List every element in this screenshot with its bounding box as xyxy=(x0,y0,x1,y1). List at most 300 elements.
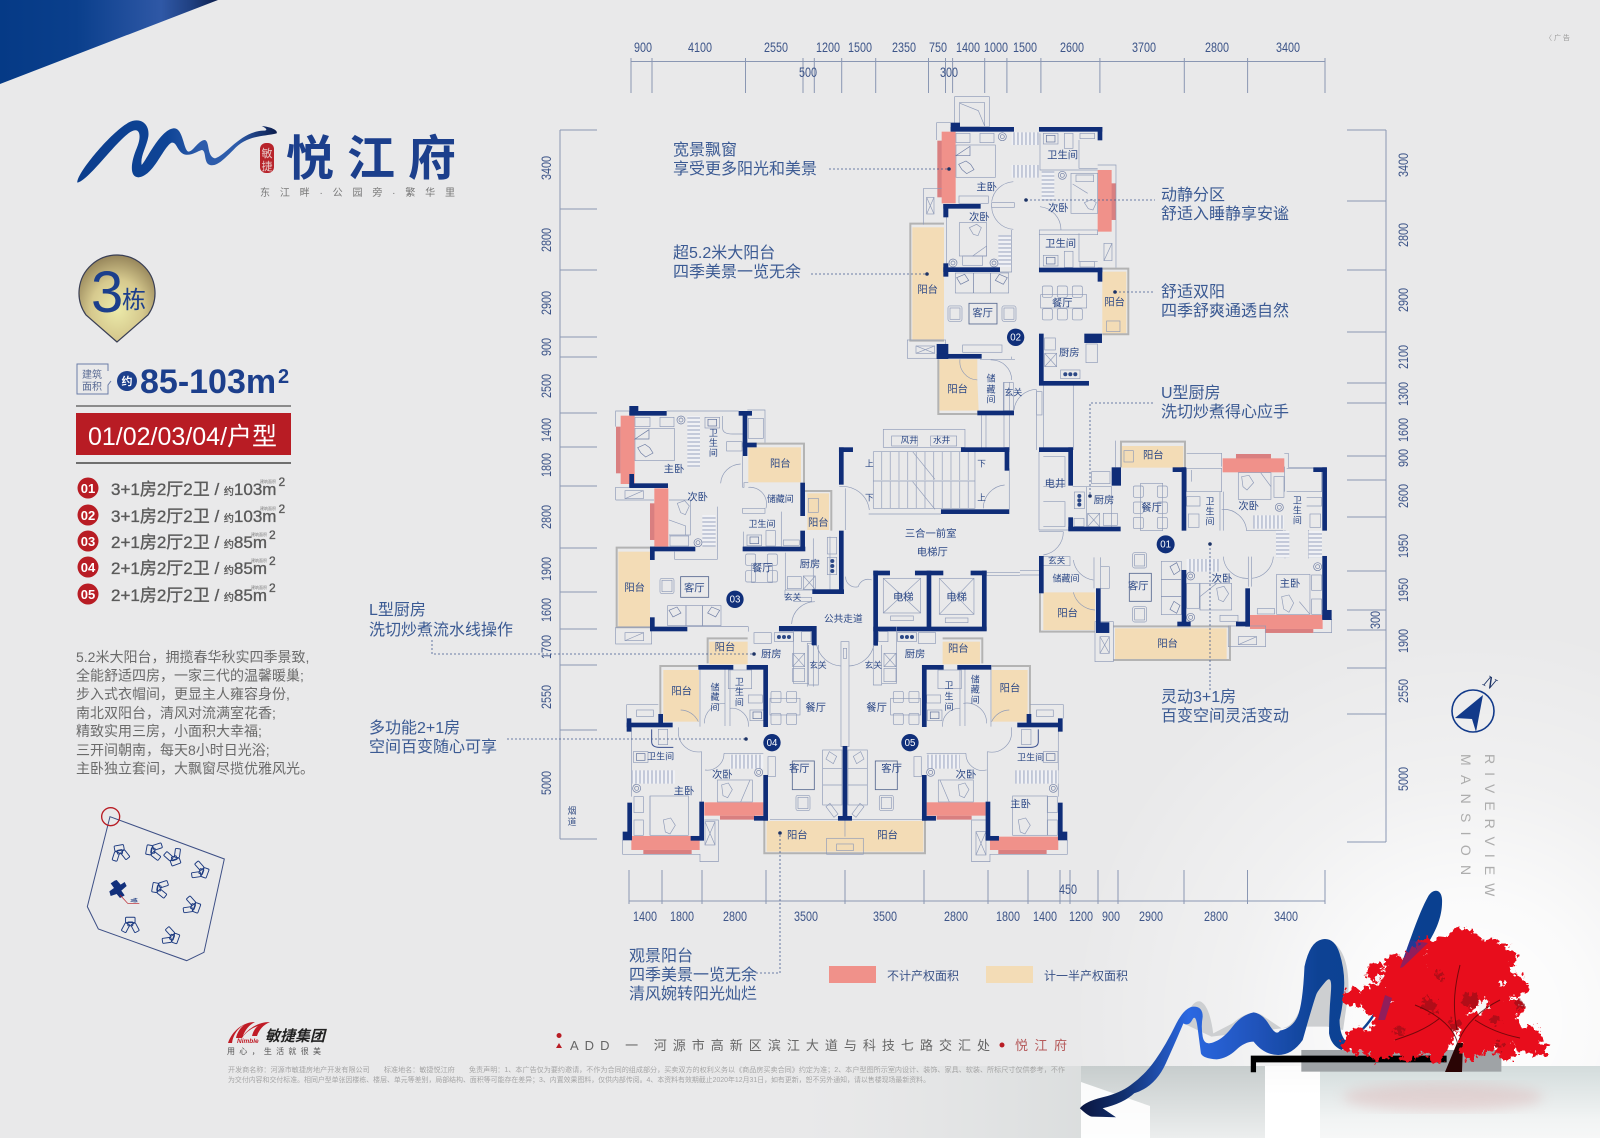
selling points paragraph: 5.2米大阳台，拥揽春华秋实四季景致, xyxy=(76,649,309,665)
room labels: 间 xyxy=(709,447,718,458)
room labels: 水井 xyxy=(933,434,951,445)
unit 02 plan xyxy=(907,97,1128,450)
flue label: 烟 xyxy=(567,805,577,816)
callout: double balcony: 四季舒爽通透自然 xyxy=(1161,302,1289,320)
room labels: 卫 xyxy=(1205,496,1214,506)
right dimension chain: 1900 xyxy=(1395,629,1411,653)
unit number 05 xyxy=(901,734,919,751)
room labels: 阳台 xyxy=(715,640,735,653)
elevators xyxy=(883,573,1020,623)
bottom dimension chain: 3400 xyxy=(1274,908,1298,924)
room labels: 储藏间 xyxy=(767,493,794,504)
right dimension chain: 5000 xyxy=(1395,767,1411,791)
left dimension chain: 1900 xyxy=(538,557,554,581)
room labels: 风井 xyxy=(901,434,918,445)
unit 03 row: 2 xyxy=(269,528,276,542)
room labels: 生 xyxy=(709,437,718,448)
room labels xyxy=(624,428,986,625)
unit 02 row xyxy=(78,502,285,526)
room labels: 餐厅 xyxy=(1141,501,1162,514)
thin outlines xyxy=(1020,441,1332,662)
room labels: 阳台 xyxy=(1057,606,1078,619)
room labels: 客厅 xyxy=(1128,579,1149,592)
room labels: 下 xyxy=(865,492,874,502)
callout: view balcony xyxy=(629,831,782,1003)
unit 03 row: 03 xyxy=(81,534,95,549)
bottom dimension chain: 1800 xyxy=(996,908,1020,924)
bay windows xyxy=(616,416,668,547)
brush landscape xyxy=(1080,891,1501,1117)
balconies xyxy=(660,638,1030,853)
room labels: 次卧 xyxy=(1212,572,1232,585)
disclaimer xyxy=(228,1065,1065,1084)
selling points paragraph xyxy=(76,649,314,776)
background glow behind tree xyxy=(1070,640,1600,1070)
unit list xyxy=(78,475,285,605)
left dimension chain: 1400 xyxy=(538,418,554,442)
room labels: 主卧 xyxy=(664,463,684,476)
unit 05 row xyxy=(78,581,276,605)
building pin badge xyxy=(79,255,155,342)
room labels: 卫生间 xyxy=(1017,752,1044,763)
right dimension chain: 1600 xyxy=(1395,418,1411,442)
room labels: 藏 xyxy=(710,691,719,702)
right dimension chain: 1950 xyxy=(1395,578,1411,602)
stairs xyxy=(873,452,975,509)
top left corner banner xyxy=(0,0,218,84)
selling points paragraph: 精致实用三房，小面积大幸福; xyxy=(76,723,262,739)
room labels: 阳台 xyxy=(770,457,791,470)
unit 01 row xyxy=(78,475,285,499)
room labels: 厨房 xyxy=(1059,346,1080,359)
bottom dimension chain: 2900 xyxy=(1139,908,1163,924)
room labels: 阳台 xyxy=(1000,681,1020,694)
room labels: 主卧 xyxy=(674,785,694,798)
right dimension chain: 1950 xyxy=(1395,534,1411,558)
room labels: 阳台 xyxy=(1157,637,1178,650)
legend xyxy=(829,966,1128,983)
furniture xyxy=(948,132,1120,379)
room labels: 三合一前室 xyxy=(905,527,956,540)
callout: big balcony: 超5.2米大阳台 xyxy=(673,244,775,262)
left dimension chain: 2550 xyxy=(538,685,554,709)
black ledge xyxy=(1251,1056,1447,1072)
room labels: 阳台 xyxy=(1143,449,1164,462)
room labels: 卫生间 xyxy=(1045,237,1076,250)
room labels: 间 xyxy=(986,394,995,405)
footer company logo xyxy=(227,1022,327,1056)
furniture xyxy=(635,416,837,626)
unit 03 row: 建筑面积 xyxy=(251,531,267,537)
room labels: 阳台 xyxy=(947,382,968,395)
bay windows xyxy=(631,802,1058,854)
right dimension chain: 2100 xyxy=(1395,345,1411,369)
divider top xyxy=(76,405,291,407)
room labels: 卫 xyxy=(735,677,744,687)
balconies xyxy=(910,224,1128,414)
room labels: 厨房 xyxy=(905,648,925,661)
room labels: 储 xyxy=(710,682,719,693)
area heading: 约 xyxy=(122,374,132,388)
unit type banner: 01/02/03/04/户型 xyxy=(88,423,277,451)
callout: L kitchen: L型厨房 xyxy=(369,601,426,619)
callout: multifunction room: 多功能2+1房 xyxy=(369,719,460,737)
room labels: 玄关 xyxy=(809,659,827,670)
room labels: 阳台 xyxy=(787,829,808,842)
room labels: 卫 xyxy=(944,681,953,691)
selling points paragraph: 主卧独立套间，大飘窗尽揽优雅风光。 xyxy=(76,760,314,776)
address line xyxy=(556,1033,1067,1053)
top dimension chain: 900 xyxy=(634,39,652,55)
unit number 05: 05 xyxy=(905,738,915,749)
unit 04 row: 04 xyxy=(81,560,96,575)
top dimension chain: 750 xyxy=(929,39,947,55)
callout: double balcony: 舒适双阳 xyxy=(1161,283,1225,301)
compass: N xyxy=(1479,671,1501,694)
disclaimer: 为交付内容和交付标准。相同户型单张因楼栋、楼层、单元等差别，局部结构、面积等可能存在差异；3、内置效果图料，仅供内部传阅。4、本资料有效期截止2020年12月31日，如有更新，恕不另外通知，请以售楼现场最新资料。 xyxy=(228,1075,930,1084)
unit 02 row: 02 xyxy=(81,508,95,523)
room labels: 客厅 xyxy=(684,582,705,595)
top dimension chain: 1500 xyxy=(848,39,872,55)
tree branches xyxy=(1395,965,1520,1046)
stroke seen through tree xyxy=(1378,940,1428,1020)
room labels: 玄关 xyxy=(1048,554,1066,565)
top dimension chain: 1500 xyxy=(1013,39,1037,55)
room labels: 储 xyxy=(971,673,980,684)
vertical slogan xyxy=(1458,754,1498,904)
callout: multifunction room xyxy=(369,719,748,756)
area heading: 85-103m xyxy=(140,363,276,401)
room labels: 间 xyxy=(735,696,744,707)
area heading: 面积 xyxy=(82,381,102,393)
callout: flexible room: 百变空间灵活变动 xyxy=(1161,707,1289,725)
building pin badge: 3 xyxy=(91,260,123,325)
right dimension chain: 2550 xyxy=(1395,679,1411,703)
callout: U kitchen: 洗切炒煮得心应手 xyxy=(1161,402,1289,421)
right dimension chain: 2600 xyxy=(1395,484,1411,508)
room labels: 客厅 xyxy=(789,762,810,775)
room labels: 客厅 xyxy=(972,306,993,319)
unit number 02: 02 xyxy=(1010,333,1021,344)
vertical slogan: MANSION xyxy=(1458,754,1474,884)
room labels: 主卧 xyxy=(1010,798,1031,811)
unit 01 plan xyxy=(1020,441,1332,662)
room labels: 间 xyxy=(1293,514,1302,525)
room labels: 厨房 xyxy=(761,648,782,661)
room labels: 主卧 xyxy=(1280,577,1300,590)
footer company logo: Nimble xyxy=(237,1038,259,1045)
room labels: 电梯 xyxy=(946,590,967,603)
unit 04 row: 建筑面积 xyxy=(251,557,267,563)
area heading: 2 xyxy=(278,366,289,388)
logo tagline: 东江畔·公园旁·繁华里 xyxy=(260,186,455,199)
building pin badge: 栋 xyxy=(122,287,146,314)
left dimension chain: 2800 xyxy=(538,505,554,529)
disclaimer: 开发商名称：河源市敏捷房地产开发有限公司 标准地名：敏捷悦江府 免责声明：1、本广告仅为要约邀请，不作为合同的组成部分，买卖双方的权利义务以《商品房买卖合同》约定为准；2、本户型图所示室内设计、装饰、家具、软装、所标尺寸仅供参考，不作 xyxy=(228,1065,1065,1074)
room labels: 次卧 xyxy=(1238,500,1259,513)
tree trunk xyxy=(1445,1043,1463,1072)
top dimension chain: 300 xyxy=(940,64,958,80)
project logo xyxy=(77,120,456,199)
bottom dimension chain: 1400 xyxy=(633,908,657,924)
room labels: 卫生间 xyxy=(1047,149,1078,162)
bottom dimension chain: 1400 xyxy=(1033,908,1057,924)
left dimension chain: 1600 xyxy=(538,598,554,622)
callout: multifunction room: 空间百变随心可享 xyxy=(369,738,497,756)
room labels: 次卧 xyxy=(712,768,733,781)
top dimension chain: 3400 xyxy=(1276,39,1300,55)
callout: L kitchen xyxy=(369,601,756,656)
unit 04 row: 2 xyxy=(269,554,276,568)
bottom dimension chain: 900 xyxy=(1102,908,1120,924)
selling points paragraph: 南北双阳台，清风对流满室花香; xyxy=(76,705,276,721)
top dimension chain: 1400 xyxy=(956,39,980,55)
unit number 01: 01 xyxy=(1160,540,1171,551)
right dimension chain: 2800 xyxy=(1395,223,1411,247)
room labels: 客厅 xyxy=(881,762,902,775)
room labels: 次卧 xyxy=(956,768,976,781)
bay windows xyxy=(1223,454,1323,633)
room labels: 卫生间 xyxy=(647,750,674,761)
callout: view balcony: 观景阳台 xyxy=(629,947,693,965)
callout: big balcony xyxy=(673,244,929,281)
unit 03 and core plan xyxy=(616,406,1020,687)
callout: L kitchen: 洗切炒煮流水线操作 xyxy=(369,621,513,639)
room labels: 上 xyxy=(865,459,874,469)
room labels: 玄关 xyxy=(1004,387,1022,398)
flue label: 道 xyxy=(567,816,577,827)
room labels xyxy=(1045,449,1302,650)
logo wordmark: 悦江府 xyxy=(286,133,456,186)
top dimension chain: 1000 xyxy=(984,39,1008,55)
room labels: 电井 xyxy=(1045,477,1065,490)
thin outlines xyxy=(616,410,1009,687)
callout: big balcony: 四季美景一览无余 xyxy=(673,262,801,281)
right dimension chain: 2900 xyxy=(1395,288,1411,312)
top dimension chain: 2600 xyxy=(1060,39,1084,55)
bottom dimension chain: 3500 xyxy=(794,908,818,924)
bottom dimension chain: 1200 xyxy=(1069,908,1093,924)
selling points paragraph: 全能舒适四房，一家三代的温馨暖巢; xyxy=(76,668,304,684)
legend: 不计产权面积 xyxy=(887,969,959,983)
right dimension chain xyxy=(1347,130,1411,842)
room labels: 间 xyxy=(1205,515,1214,526)
logo brush stroke xyxy=(77,120,277,183)
bottom dimension chain: 2800 xyxy=(723,908,747,924)
unit 03 row: 2+1房2厅2卫 / 约85m xyxy=(111,533,267,552)
swoosh mark xyxy=(228,1022,270,1043)
room labels xyxy=(647,640,1044,842)
unit number 03: 03 xyxy=(730,595,740,606)
room labels: 间 xyxy=(944,701,953,712)
unit 02 row: 2 xyxy=(278,502,285,516)
top dimension chain xyxy=(631,39,1325,93)
callout: flexible room xyxy=(1161,542,1289,725)
callout: zoning xyxy=(1024,186,1289,223)
left dimension chain: 1700 xyxy=(538,635,554,659)
left dimension chain: 5000 xyxy=(538,771,554,795)
right dimension chain: 1300 xyxy=(1395,382,1411,406)
callout: zoning: 动静分区 xyxy=(1161,186,1225,204)
room labels: 阳台 xyxy=(1104,296,1125,309)
furniture xyxy=(1074,451,1322,622)
unit 04 row xyxy=(78,554,276,578)
thin outlines xyxy=(907,97,1116,450)
unit number 03 xyxy=(726,591,744,608)
room labels: 次卧 xyxy=(687,490,708,503)
callout: U kitchen xyxy=(1088,384,1289,498)
room labels: 玄关 xyxy=(865,659,882,670)
site plan key map xyxy=(87,808,224,961)
room labels xyxy=(917,149,1125,405)
left dimension chain: 2800 xyxy=(538,228,554,252)
top dimension chain: 2550 xyxy=(764,39,788,55)
unit 02 row: 3+1房2厅2卫 / 约103m xyxy=(111,507,276,526)
tree gaps xyxy=(1377,974,1506,1010)
callout: zoning: 舒适入睡静享安谧 xyxy=(1161,205,1289,223)
room labels: 阳台 xyxy=(808,516,829,529)
callout: U kitchen: U型厨房 xyxy=(1161,384,1221,402)
callout: double balcony xyxy=(1113,283,1289,320)
callout: bay window: 宽景飘窗 xyxy=(673,141,737,159)
vertical slogan: RIVERVIEW xyxy=(1482,754,1498,904)
unit type banner xyxy=(76,413,291,455)
small ad mark: 〈 广 告 xyxy=(1545,33,1570,42)
walls xyxy=(623,626,1067,841)
room labels: 储藏间 xyxy=(1053,573,1079,584)
unit number 04: 04 xyxy=(767,738,778,749)
unit 01 row: 建筑面积 xyxy=(260,478,276,484)
room labels: 储 xyxy=(986,373,995,384)
right dimension chain: 300 xyxy=(1367,611,1383,629)
room labels: 上 xyxy=(977,492,986,502)
room labels: 藏 xyxy=(971,684,980,695)
floor reflection band xyxy=(800,1066,1600,1138)
callout: view balcony: 清风婉转阳光灿烂 xyxy=(629,985,757,1003)
walls xyxy=(629,406,1009,646)
unit number 01 xyxy=(1157,535,1175,553)
bottom dimension chain: 3500 xyxy=(873,908,897,924)
room labels: 阳台 xyxy=(917,283,938,296)
unit number 02 xyxy=(1007,329,1024,346)
bottom dimension chain: 1800 xyxy=(670,908,694,924)
top dimension chain: 4100 xyxy=(688,39,712,55)
logo seal: 捷 xyxy=(262,159,272,173)
unit 05 row: 2 xyxy=(269,581,276,595)
room labels: 生 xyxy=(1293,504,1302,515)
step base xyxy=(1301,1050,1501,1072)
red tree xyxy=(1341,928,1547,1072)
area heading xyxy=(77,363,289,401)
units 04 and 05 plan xyxy=(623,626,1067,862)
site plan key map: 3栋 xyxy=(130,897,138,904)
compass xyxy=(1452,671,1501,732)
unit 02 row: 建筑面积 xyxy=(260,505,276,511)
bottom dimension chain xyxy=(629,870,1325,924)
thin outlines xyxy=(623,627,1067,862)
room labels: 间 xyxy=(971,694,980,705)
logo seal xyxy=(260,143,274,173)
bottom dimension chain: 2800 xyxy=(944,908,968,924)
room labels: 餐厅 xyxy=(1052,296,1073,309)
unit 01 row: 01 xyxy=(81,481,95,496)
room labels: 电梯 xyxy=(893,590,914,603)
blue brush stroke xyxy=(1080,891,1442,1117)
room labels: 卫 xyxy=(709,428,718,438)
balconies xyxy=(1040,442,1230,660)
legend: 计一半产权面积 xyxy=(1044,969,1128,983)
left dimension chain: 900 xyxy=(538,338,554,356)
unit 01 row: 2 xyxy=(278,475,285,489)
room labels: 次卧 xyxy=(1048,201,1069,214)
callout: bay window: 享受更多阳光和美景 xyxy=(673,160,817,178)
room labels: 次卧 xyxy=(969,210,990,223)
room labels: 厨房 xyxy=(800,558,820,571)
room labels: 卫 xyxy=(1293,495,1302,505)
room labels: 阳台 xyxy=(948,642,969,655)
room labels: 卫生间 xyxy=(749,518,775,529)
divider bottom xyxy=(76,462,291,464)
balconies xyxy=(617,444,831,627)
right dimension chain: 3400 xyxy=(1395,153,1411,177)
unit 04 row: 2+1房2厅2卫 / 约85m xyxy=(111,559,267,578)
room labels: 餐厅 xyxy=(866,701,887,714)
selling points paragraph: 三开间朝南，每天8小时日光浴; xyxy=(76,742,270,758)
room labels: 阳台 xyxy=(671,684,692,697)
top dimension chain: 2800 xyxy=(1205,39,1229,55)
room labels: 餐厅 xyxy=(752,561,773,574)
walls xyxy=(1039,447,1332,633)
callout: view balcony: 四季美景一览无余 xyxy=(629,965,757,984)
room labels: 厨房 xyxy=(1094,494,1114,507)
logo seal: 敏 xyxy=(262,146,272,160)
bay windows xyxy=(937,132,1116,232)
top dimension chain: 500 xyxy=(799,64,817,80)
room labels: 阳台 xyxy=(624,581,645,594)
room labels: 下 xyxy=(977,459,986,469)
furniture xyxy=(632,632,1058,835)
unit 03 row xyxy=(78,528,276,552)
callout: bay window xyxy=(673,141,951,178)
area heading: 建筑 xyxy=(82,368,102,381)
left dimension chain: 2500 xyxy=(538,374,554,398)
brush shadow xyxy=(1183,940,1348,1037)
address line: 悦江府 xyxy=(1015,1038,1067,1053)
bottom dimension chain: 450 xyxy=(1059,881,1077,897)
room labels: 餐厅 xyxy=(805,701,826,714)
room labels: 公共走道 xyxy=(824,613,863,625)
top dimension chain: 3700 xyxy=(1132,39,1156,55)
unit 05 row: 建筑面积 xyxy=(251,584,267,590)
room labels: 玄关 xyxy=(784,591,802,602)
callout: flexible room: 灵动3+1房 xyxy=(1161,688,1236,706)
left dimension chain: 1800 xyxy=(538,453,554,477)
room labels: 主卧 xyxy=(976,180,997,193)
left dimension chain xyxy=(538,130,597,839)
room labels: 生 xyxy=(735,686,744,697)
top dimension chain: 1200 xyxy=(816,39,840,55)
tree shadows xyxy=(1395,971,1525,1049)
left dimension chain: 3400 xyxy=(538,156,554,180)
address line: ADD 一 河源市高新区滨江大道与科技七路交汇处 xyxy=(570,1038,990,1053)
room labels: 阳台 xyxy=(877,829,898,842)
room labels: 电梯厅 xyxy=(917,545,948,558)
unit number 04 xyxy=(763,734,781,751)
tree crown xyxy=(1341,928,1547,1062)
left dimension chain: 2900 xyxy=(538,291,554,315)
unit 05 row: 05 xyxy=(81,587,95,602)
unit 01 row: 3+1房2厅2卫 / 约103m xyxy=(111,480,276,499)
